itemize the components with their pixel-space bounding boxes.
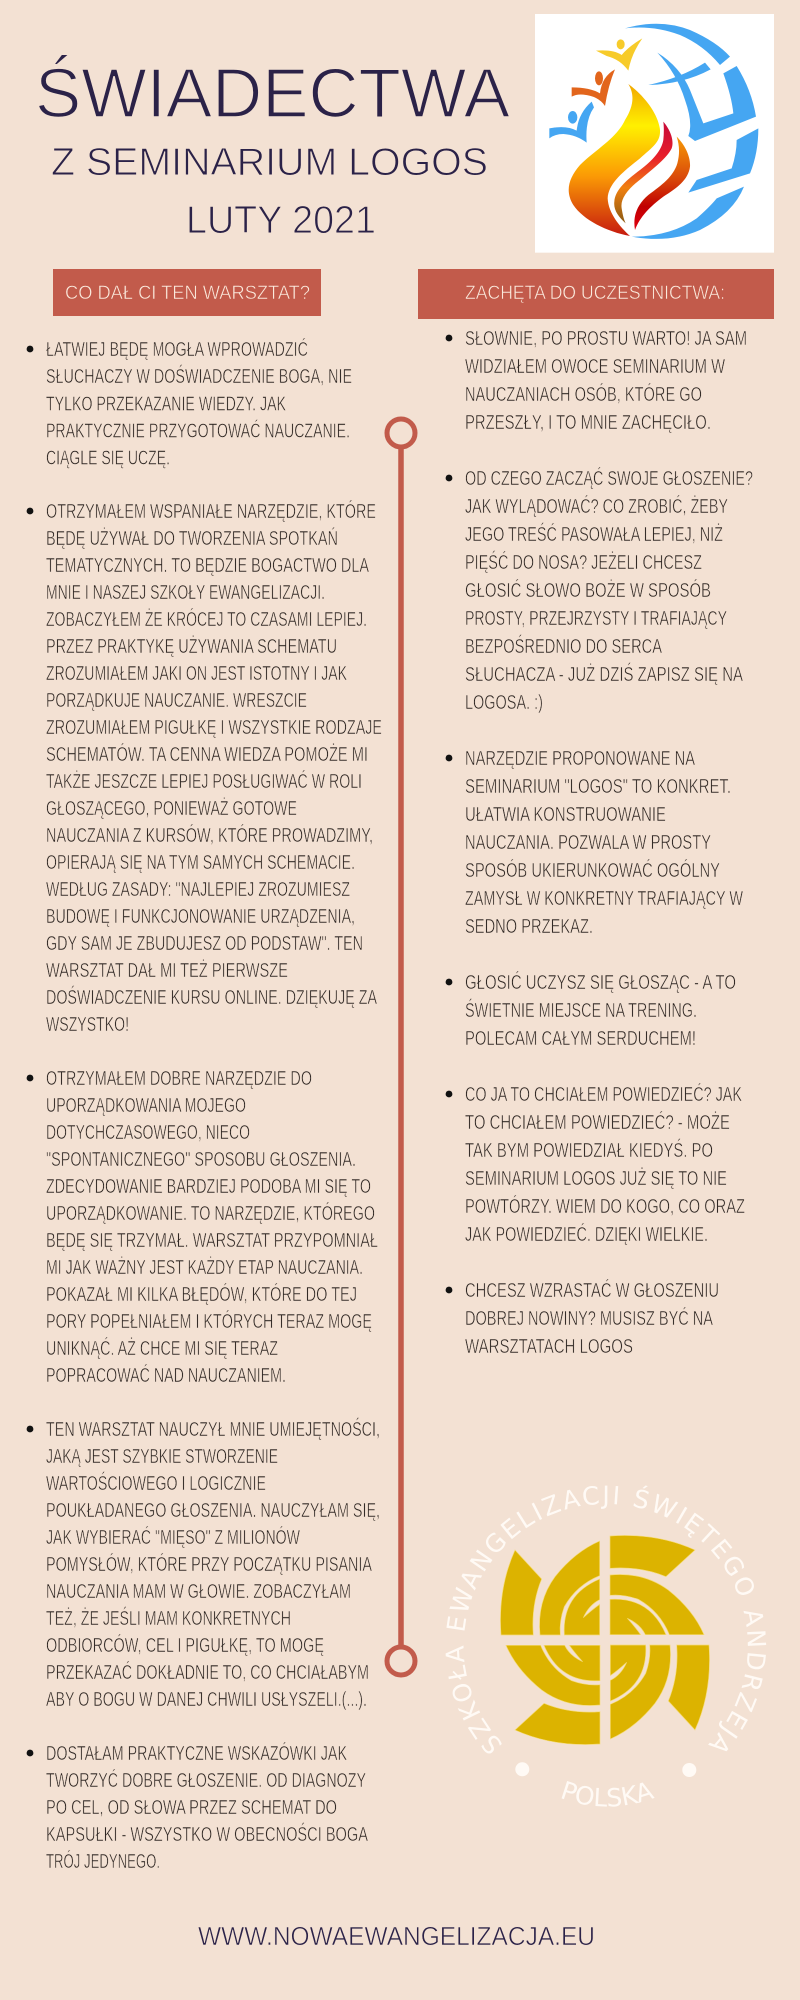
encouragement 2: GŁOSIĆ SŁOWO BOŻE W SPOSÓB	[465, 579, 711, 602]
panel: left testimonials	[27, 338, 382, 1873]
testimonial 4: POMYSŁÓW, KTÓRE PRZY POCZĄTKU PISANIA	[46, 1553, 372, 1576]
heading: Świadectwa: ŚWIADECTWA	[35, 53, 510, 132]
testimonial 3: PORY POPEŁNIAŁEM I KTÓRYCH TERAZ MOGĘ	[46, 1310, 372, 1333]
encouragement 3: NAUCZANIA. POZWALA W PROSTY	[465, 832, 711, 854]
testimonial 2: ZROZUMIAŁEM JAKI ON JEST ISTOTNY I JAK	[46, 663, 347, 685]
panel header: zachęta do uczestnictwa: ZACHĘTA DO UCZESTNICTWA:	[465, 283, 725, 304]
testimonial 3: OTRZYMAŁEM DOBRE NARZĘDZIE DO	[46, 1068, 312, 1090]
encouragement 1: PRZESZŁY, I TO MNIE ZACHĘCIŁO.	[465, 412, 711, 434]
testimonial 2: PORZĄDKUJE NAUCZANIE. WRESZCIE	[46, 690, 307, 712]
testimonial 4: POUKŁADANEGO GŁOSZENIA. NAUCZYŁAM SIĘ,	[46, 1500, 380, 1522]
encouragement 3: UŁATWIA KONSTRUOWANIE	[465, 804, 666, 826]
encouragement 4: POLECAM CAŁYM SERDUCHEM!	[465, 1028, 696, 1050]
testimonial 2: BUDOWĘ I FUNKCJONOWANIE URZĄDZENIA,	[46, 906, 355, 928]
testimonial 2: NAUCZANIA Z KURSÓW, KTÓRE PROWADZIMY,	[46, 824, 373, 847]
testimonial 4: TEŻ, ŻE JEŚLI MAM KONKRETNYCH	[46, 1606, 291, 1630]
emblem dots	[515, 1762, 696, 1777]
encouragement 5: JAK POWIEDZIEĆ. DZIĘKI WIELKIE.	[465, 1223, 708, 1246]
testimonial 1	[27, 338, 352, 470]
testimonial 3: POKAZAŁ MI KILKA BŁĘDÓW, KTÓRE DO TEJ	[46, 1283, 357, 1306]
icon: gold pinwheel	[500, 1535, 710, 1745]
testimonial 5: PO CEL, OD SŁOWA PRZEZ SCHEMAT DO	[46, 1797, 337, 1819]
testimonial 2: DOŚWIADCZENIE KURSU ONLINE. DZIĘKUJĘ ZA	[46, 985, 377, 1009]
panel header: zachęta do uczestnictwa	[418, 269, 774, 319]
testimonial 3: POPRACOWAĆ NAD NAUCZANIEM.	[46, 1364, 286, 1387]
encouragement 6	[446, 1279, 719, 1358]
testimonial 1: ŁATWIEJ BĘDĘ MOGŁA WPROWADZIĆ	[46, 338, 308, 361]
testimonial 3	[27, 1068, 378, 1387]
testimonial 2: TAKŻE JESZCZE LEPIEJ POSŁUGIWAĆ W ROLI	[46, 770, 362, 793]
testimonial 5: KAPSUŁKI - WSZYSTKO W OBECNOŚCI BOGA	[46, 1822, 368, 1846]
encouragement 6: CHCESZ WZRASTAĆ W GŁOSZENIU	[465, 1279, 719, 1302]
testimonial 1: CIĄGLE SIĘ UCZĘ.	[46, 448, 170, 470]
testimonial 3: MI JAK WAŻNY JEST KAŻDY ETAP NAUCZANIA.	[46, 1256, 363, 1279]
testimonial 2	[27, 500, 382, 1036]
testimonial 4: PRZEKAZAĆ DOKŁADNIE TO, CO CHCIAŁABYM	[46, 1661, 369, 1684]
testimonial 3: UPORZĄDKOWANIA MOJEGO	[46, 1095, 246, 1117]
testimonial 4	[27, 1417, 380, 1711]
footer url: WWW.NOWAEWANGELIZACJA.EU	[198, 1921, 595, 1951]
testimonial 1: PRAKTYCZNIE PRZYGOTOWAĆ NAUCZANIE.	[46, 420, 350, 442]
testimonial 2: WARSZTAT DAŁ MI TEŻ PIERWSZE	[46, 959, 288, 982]
testimonial 5: DOSTAŁAM PRAKTYCZNE WSKAZÓWKI JAK	[46, 1742, 347, 1765]
icon: flame and globe logo	[535, 14, 774, 253]
encouragement 6: DOBREJ NOWINY? MUSISZ BYĆ NA	[465, 1307, 713, 1330]
testimonial 4: TEN WARSZTAT NAUCZYŁ MNIE UMIEJĘTNOŚCI,	[46, 1417, 380, 1441]
testimonial 4: JAKĄ JEST SZYBKIE STWORZENIE	[46, 1446, 278, 1468]
encouragement 4: ŚWIETNIE MIEJSCE NA TRENING.	[465, 998, 697, 1022]
testimonial 4: JAK WYBIERAĆ "MIĘSO" Z MILIONÓW	[46, 1526, 300, 1549]
testimonial 4: ABY O BOGU W DANEJ CHWILI USŁYSZELI.(...).	[46, 1689, 367, 1711]
testimonial 2: TEMATYCZNYCH. TO BĘDZIE BOGACTWO DLA	[46, 555, 369, 577]
icon: school of evangelization emblem	[446, 1486, 766, 1807]
encouragement 3: NARZĘDZIE PROPONOWANE NA	[465, 748, 695, 770]
testimonial 5: TRÓJ JEDYNEGO.	[46, 1850, 160, 1873]
testimonial 5	[27, 1742, 368, 1873]
testimonial 1: SŁUCHACZY W DOŚWIADCZENIE BOGA, NIE	[46, 364, 352, 388]
testimonial 2: WSZYSTKO!	[46, 1014, 129, 1036]
timeline	[387, 419, 415, 1675]
testimonial 4: NAUCZANIA MAM W GŁOWIE. ZOBACZYŁAM	[46, 1581, 351, 1603]
testimonial 3: DOTYCHCZASOWEGO, NIECO	[46, 1122, 250, 1144]
testimonial 4: ODBIORCÓW, CEL I PIGUŁKĘ, TO MOGĘ	[46, 1634, 324, 1657]
panel: right encouragements	[446, 328, 753, 1358]
panel header: co dał ci ten warsztat	[53, 269, 321, 316]
testimonial 2: OTRZYMAŁEM WSPANIAŁE NARZĘDZIE, KTÓRE	[46, 500, 376, 523]
title	[35, 53, 510, 242]
encouragement 3	[446, 748, 743, 938]
encouragement 3: SEDNO PRZEKAZ.	[465, 916, 593, 938]
encouragement 5: TAK BYM POWIEDZIAŁ KIEDYŚ. PO	[465, 1138, 713, 1162]
panel header: co dał ci ten warsztat: CO DAŁ CI TEN WARSZTAT?	[65, 283, 310, 304]
encouragement 2: BEZPOŚREDNIO DO SERCA	[465, 634, 662, 658]
encouragement 6: WARSZTATACH LOGOS	[465, 1336, 633, 1358]
encouragement 1: NAUCZANIACH OSÓB, KTÓRE GO	[465, 383, 702, 406]
testimonial 4: WARTOŚCIOWEGO I LOGICZNIE	[46, 1471, 266, 1495]
testimonial 3: UPORZĄDKOWANIE. TO NARZĘDZIE, KTÓREGO	[46, 1202, 375, 1225]
encouragement 5	[446, 1083, 745, 1246]
testimonial 2: GŁOSZĄCEGO, PONIEWAŻ GOTOWE	[46, 797, 297, 820]
testimonial 1: TYLKO PRZEKAZANIE WIEDZY. JAK	[46, 394, 286, 416]
encouragement 2	[446, 467, 753, 714]
testimonial 2: MNIE I NASZEJ SZKOŁY EWANGELIZACJI.	[46, 582, 325, 604]
encouragement 1	[446, 328, 747, 434]
testimonial 3: UNIKNĄĆ. AŻ CHCE MI SIĘ TERAZ	[46, 1337, 278, 1360]
encouragement 2: LOGOSA. :)	[465, 692, 543, 714]
testimonial 3: BĘDĘ SIĘ TRZYMAŁ. WARSZTAT PRZYPOMNIAŁ	[46, 1230, 378, 1252]
testimonial 2: ZROZUMIAŁEM PIGUŁKĘ I WSZYSTKIE RODZAJE	[46, 717, 382, 739]
heading: luty 2021: LUTY 2021	[186, 199, 376, 242]
encouragement 2: PIĘŚĆ DO NOSA? JEŻELI CHCESZ	[465, 550, 702, 574]
testimonial 2: GDY SAM JE ZBUDUJESZ OD PODSTAW". TEN	[46, 933, 363, 955]
testimonial 2: BĘDĘ UŻYWAŁ DO TWORZENIA SPOTKAŃ	[46, 527, 338, 550]
testimonial 5: TWORZYĆ DOBRE GŁOSZENIE. OD DIAGNOZY	[46, 1769, 366, 1792]
testimonial 3: ZDECYDOWANIE BARDZIEJ PODOBA MI SIĘ TO	[46, 1176, 371, 1198]
heading: z seminarium Logos: Z SEMINARIUM LOGOS	[51, 141, 488, 184]
encouragement 4	[446, 971, 736, 1050]
testimonial 2: SCHEMATÓW. TA CENNA WIEDZA POMOŻE MI	[46, 743, 368, 766]
testimonial 2: WEDŁUG ZASADY: "NAJLEPIEJ ZROZUMIESZ	[46, 879, 350, 901]
testimonial 2: ZOBACZYŁEM ŻE KRÓCEJ TO CZASAMI LEPIEJ.	[46, 608, 367, 631]
emblem ring text: SZKOŁA EWANGELIZACJI ŚWIĘTEGO ANDRZEJA	[446, 1486, 766, 1754]
emblem country label: POLSKA	[562, 1781, 654, 1807]
testimonial 3: "SPONTANICZNEGO" SPOSOBU GŁOSZENIA.	[46, 1149, 356, 1171]
testimonial 2: OPIERAJĄ SIĘ NA TYM SAMYCH SCHEMACIE.	[46, 852, 355, 874]
testimonial 2: PRZEZ PRAKTYKĘ UŻYWANIA SCHEMATU	[46, 635, 337, 658]
